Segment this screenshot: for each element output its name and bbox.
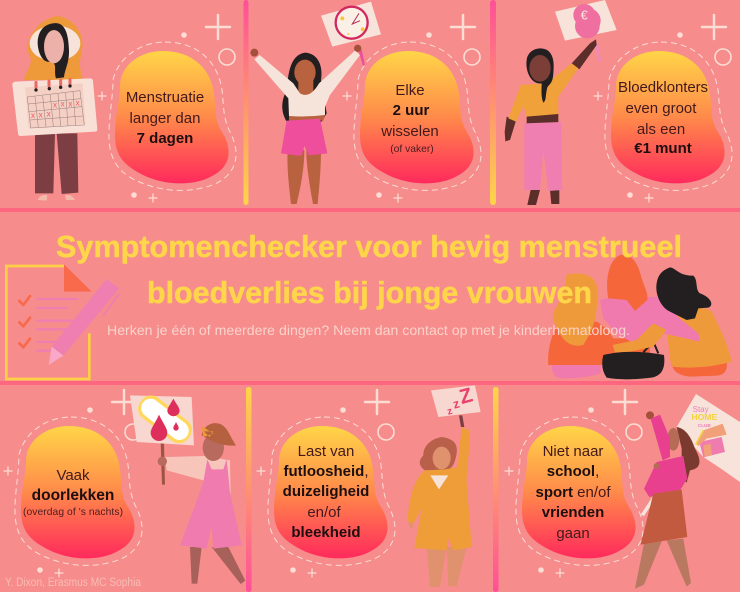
figure: woman with stay home sign: Stay [693,405,709,414]
text: niet naar school: gaan [556,525,590,542]
text: menstruatie: 7 dagen [137,130,193,147]
figure: woman with calendar: x [39,110,43,119]
icon: checklist with pen [6,264,119,379]
figure: woman with stay home sign [635,394,740,589]
text: elke 2 uur: 2 uur [393,102,429,119]
figure: woman with calendar: x [68,100,72,109]
figure: woman with zzz sign [408,383,481,587]
text: futloosheid: en/of [307,504,342,521]
blob with decorations [505,390,643,577]
panel: elke 2 uur wisselen [250,2,481,204]
text: bloedklonters: als een [637,121,685,138]
text: niet naar school: Niet naar [543,443,603,460]
text: doorlekken: Vaak [56,467,90,484]
text: niet naar school: vrienden [542,504,604,521]
title: Symptomenchecker voor hevig menstrueel [56,229,682,264]
text: bloedklonters: Bloedklonters [618,79,708,96]
text: doorlekken: doorlekken [32,487,114,504]
figure: woman with calendar: x [53,101,57,110]
blob with decorations [594,15,732,202]
text: futloosheid: Last van [298,443,354,460]
subtitle: Herken je één of meerdere dingen? Neem dan contact op met je kinderhematoloog. [107,322,630,338]
blob with decorations [343,15,481,202]
text: bloedklonters: €1 munt [634,140,692,157]
figure: woman with zzz sign: z [451,396,461,412]
figure: woman with calendar: x [61,100,65,109]
text: bloedklonters: even groot [626,100,697,117]
panel: bloedklonters [505,0,732,205]
text: futloosheid: bleekheid [291,524,361,541]
text: menstruatie: langer dan [130,110,200,127]
figure: woman with stay home sign: HOME [691,412,718,422]
figure: woman with zzz sign: z [446,406,454,418]
text: futloosheid: duizeligheid [283,483,369,500]
panel: vaak doorlekken [4,390,245,584]
text: doorlekken: (overdag of 's nachts) [23,507,123,518]
credit: Y. Dixon, Erasmus MC Sophia [5,577,142,589]
blob with decorations [257,390,395,577]
text: menstruatie: Menstruatie [126,89,204,106]
text: futloosheid: futloosheid, [284,463,368,480]
figure: woman with pad sign [130,391,245,584]
figure: woman with clock sign [250,2,381,204]
figure: woman with calendar: x [31,111,35,120]
figure: woman with coin sign: € [581,8,588,22]
figure: woman with calendar: x [47,109,51,118]
blob with decorations [4,390,142,577]
title: bloedverlies bij jonge vrouwen [147,275,592,310]
figure: woman with coin sign [505,0,617,205]
text: elke 2 uur: Elke [395,82,425,99]
illustration: three women from behind [548,255,732,379]
text: niet naar school: sport en/of [535,484,611,501]
panel: futloosheid [257,383,481,587]
text: elke 2 uur: (of vaker) [390,144,434,155]
figure: woman with calendar [12,16,97,201]
panel: menstruatie langer dan 7 dagen [12,15,236,202]
blob with decorations [98,15,236,202]
panel: niet naar school [505,390,740,589]
figure: woman with calendar: x [76,99,80,108]
figure: woman with zzz sign: Z [457,383,475,409]
figure: woman with stay home sign: CLUB [698,423,711,428]
text: elke 2 uur: wisselen [380,123,439,140]
text: niet naar school: school, [547,463,599,480]
